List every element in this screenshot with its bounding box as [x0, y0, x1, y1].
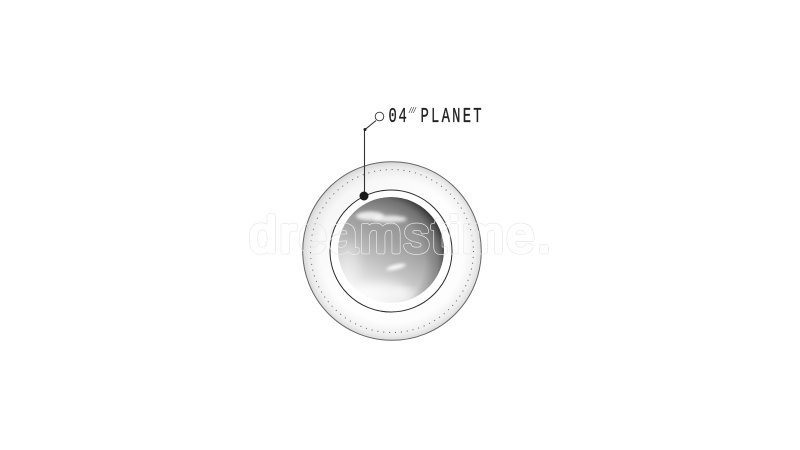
- outer ring: [303, 162, 481, 340]
- label slashes: ///: [408, 106, 416, 115]
- anchor dot: [360, 192, 368, 200]
- dotted orbit: [310, 170, 474, 332]
- planet clouds: [340, 212, 417, 301]
- planet: [338, 197, 444, 303]
- label number: 04: [388, 105, 409, 129]
- small ring marker: [375, 112, 384, 121]
- inner ring: [330, 190, 452, 312]
- leader line: [364, 120, 376, 196]
- leader elbow dot: [364, 128, 366, 131]
- label name: PLANET: [420, 105, 484, 129]
- watermark: [248, 213, 549, 255]
- infographic: planet diagram: [248, 107, 549, 341]
